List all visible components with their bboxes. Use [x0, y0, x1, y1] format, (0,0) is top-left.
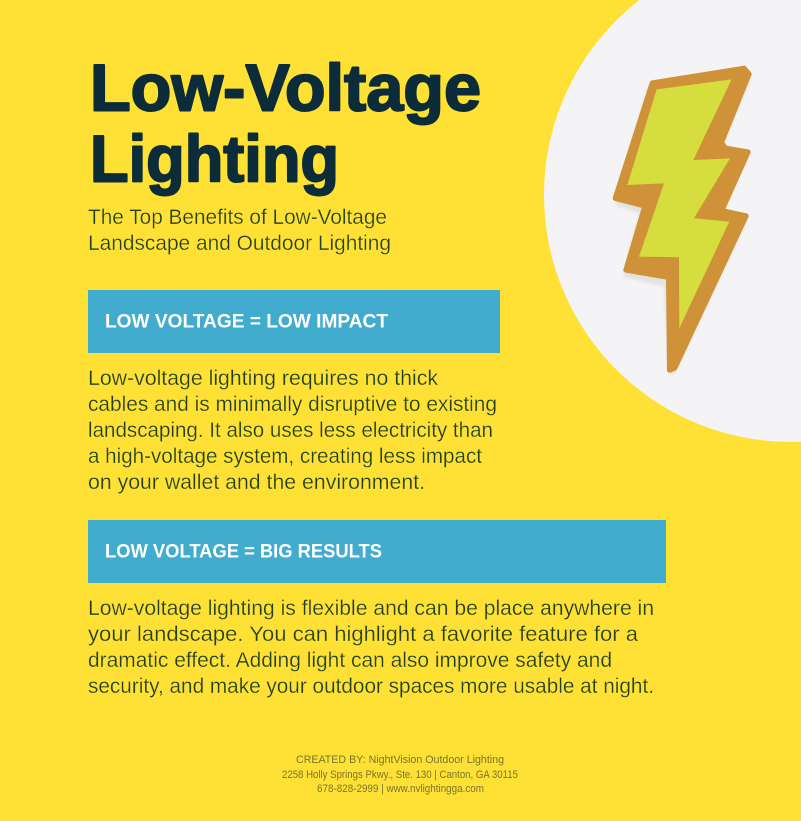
panel: low impact heading: LOW VOLTAGE = LOW IMPACT [105, 310, 388, 332]
text block: big results [88, 597, 654, 698]
text block: low impact: on your wallet and the environment. [88, 471, 425, 494]
white circle backdrop [544, 0, 801, 442]
subtitle: The Top Benefits of Low-Voltage [88, 206, 387, 229]
text block: low impact: landscaping. It also uses less electricity than [88, 419, 493, 442]
subtitle [88, 206, 391, 255]
footer credits [282, 754, 518, 795]
icon: lightning bolt [615, 68, 750, 375]
footer credits: CREATED BY: NightVision Outdoor Lighting [296, 754, 504, 766]
text block: low impact: cables and is minimally disruptive to existing [88, 393, 497, 416]
title: Lighting [90, 122, 339, 196]
title: Low-Voltage [90, 50, 481, 124]
footer credits: 2258 Holly Springs Pkwy., Ste. 130 | Canton, GA 30115 [282, 769, 518, 781]
text block: big results: dramatic effect. Adding light can also improve safety and [88, 649, 612, 672]
text block: low impact: Low-voltage lighting requires no thick [88, 367, 439, 390]
text block: big results: Low-voltage lighting is flexible and can be place anywhere in [88, 597, 654, 620]
panel: big results heading: LOW VOLTAGE = BIG RESULTS [105, 540, 382, 562]
text block: low impact: a high-voltage system, creating less impact [88, 445, 482, 468]
text block: low impact [88, 367, 497, 494]
panel: low impact heading [88, 290, 500, 353]
panel: big results heading [88, 520, 666, 583]
footer credits: 678-828-2999 | www.nvlightingga.com [317, 783, 484, 795]
title [90, 50, 481, 196]
text block: big results: your landscape. You can highlight a favorite feature for a [88, 623, 638, 646]
text block: big results: security, and make your outdoor spaces more usable at night. [88, 675, 654, 698]
subtitle: Landscape and Outdoor Lighting [88, 232, 391, 255]
